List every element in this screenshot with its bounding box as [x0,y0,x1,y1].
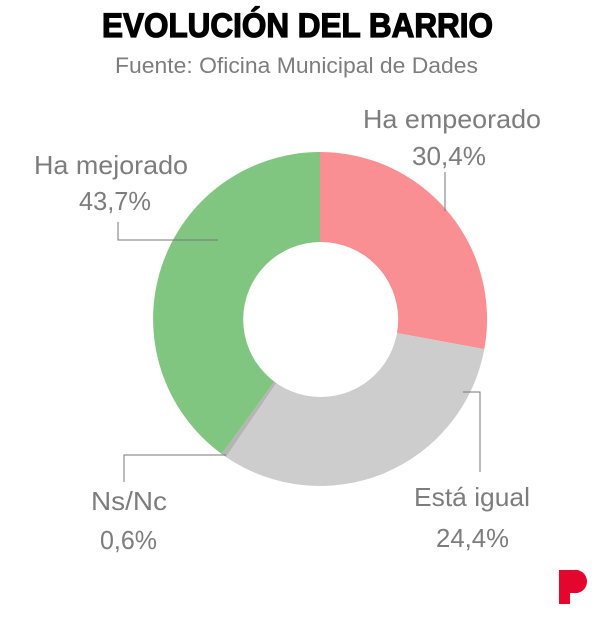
donut chart [153,152,487,486]
slice: Está igual [226,319,484,486]
title: EVOLUCIÓN DEL BARRIO [102,7,493,45]
subtitle: source: Fuente: Oficina Municipal de Dades [115,53,478,78]
label: Ha mejorado [34,150,188,216]
leader line: Ha mejorado [118,222,218,240]
label: Está igual [414,482,530,553]
label: Ns/Nc: 0,6% [100,525,157,555]
slice: Ns/Nc [222,319,320,457]
label: Ha empeorado: 30,4% [412,141,486,171]
label: Está igual: 24,4% [436,523,509,553]
donut hole [243,242,398,397]
leader line: Ha empeorado [444,172,446,211]
label: Ha empeorado: Ha empeorado [363,104,541,134]
leader line: Está igual [463,392,480,472]
label: Ns/Nc [91,486,167,555]
label: Ns/Nc: Ns/Nc [91,486,167,516]
slice: Ha mejorado [153,152,320,454]
label: Ha empeorado [363,104,541,171]
label: Está igual: Está igual [414,482,530,512]
label: Ha mejorado: Ha mejorado [34,150,188,180]
leader line: Ns/Nc [124,455,226,482]
icon: red P logo [559,570,587,604]
label: Ha mejorado: 43,7% [79,186,151,216]
slice: Ha empeorado [320,152,487,349]
